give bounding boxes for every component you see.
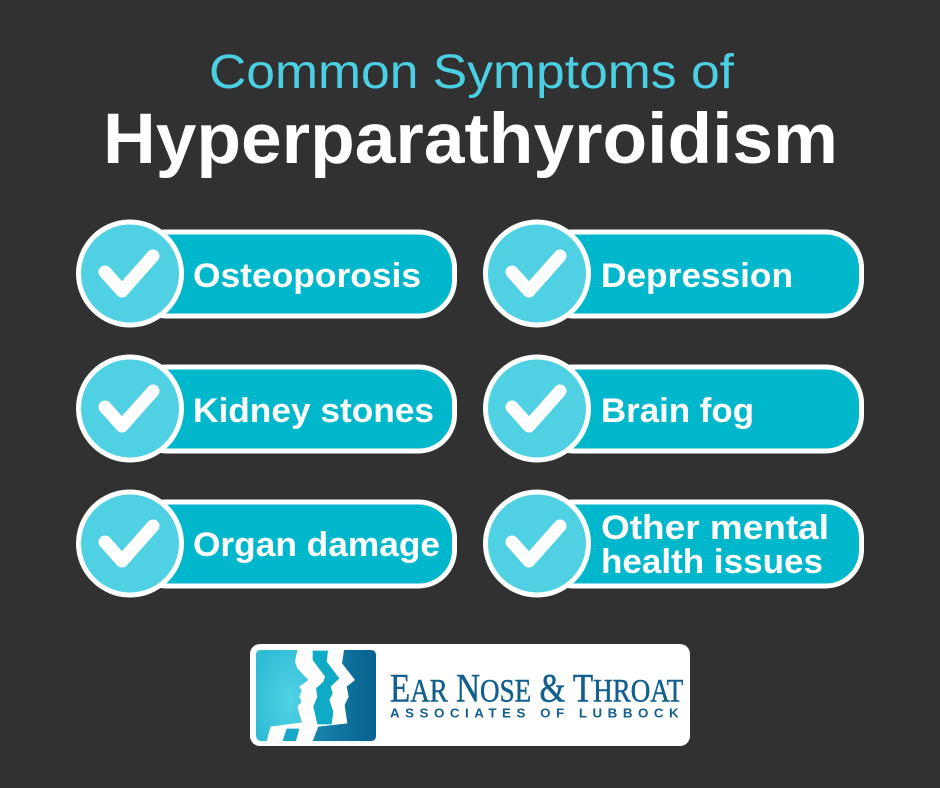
symptom: other mental health issues: health issues [601, 543, 823, 581]
symptom: other mental health issues [486, 492, 862, 595]
symptom: osteoporosis [78, 222, 454, 325]
symptom: organ damage [78, 492, 454, 595]
logo tagline: ASSOCIATES OF LUBBOCK [390, 706, 679, 721]
symptom: other mental health issues: Other mental [601, 509, 829, 547]
icon: check mark [512, 526, 560, 561]
symptom: brain fog: Brain fog [601, 392, 754, 430]
icon: check mark [105, 256, 153, 291]
logo icon: light profile [256, 650, 308, 741]
logo icon: chin block [283, 729, 299, 741]
symptom: brain fog [486, 357, 862, 460]
title line: common symptoms of: Common Symptoms of [209, 46, 735, 99]
symptom: osteoporosis: Osteoporosis [193, 257, 421, 295]
icon: check mark [512, 391, 560, 426]
icon: check mark [105, 391, 153, 426]
logo icon: middle profile [313, 651, 339, 724]
icon: check mark [512, 256, 560, 291]
symptom: organ damage: Organ damage [193, 526, 440, 564]
symptom: kidney stones [78, 357, 454, 460]
logo wordmark: EAR NOSE & THROAT [390, 666, 683, 711]
title line: hyperparathyroidism: Hyperparathyroidism [103, 100, 838, 179]
icon: check mark [105, 526, 153, 561]
symptom: kidney stones: Kidney stones [193, 392, 434, 430]
logo icon: dark profile [313, 650, 376, 741]
symptom: depression: Depression [601, 257, 793, 295]
logo card [250, 644, 690, 746]
symptom: depression [486, 222, 862, 325]
title [103, 46, 838, 179]
